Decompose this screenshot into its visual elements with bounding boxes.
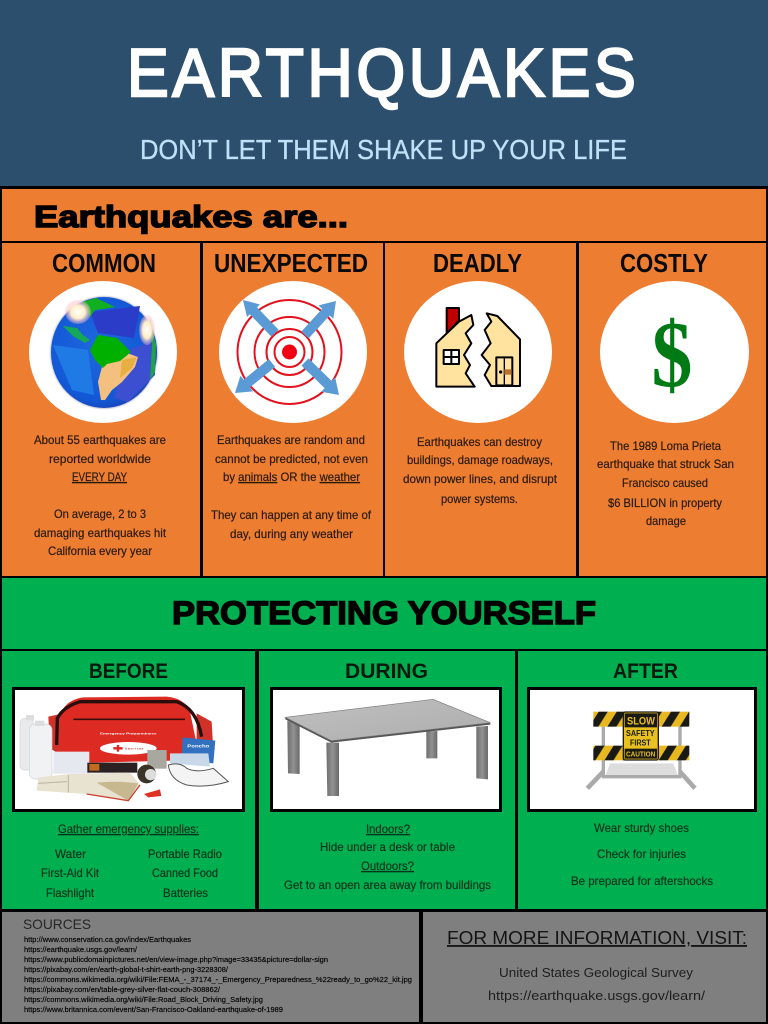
heading: protecting yourself: PROTECTING YOURSELF bbox=[172, 595, 596, 631]
panel: more information bbox=[423, 912, 766, 1022]
text: costly body bbox=[597, 439, 734, 528]
panel: sources bbox=[2, 912, 419, 1022]
text: before supplies: Gather emergency supplies: bbox=[58, 822, 199, 836]
heading: unexpected: UNEXPECTED bbox=[214, 250, 368, 278]
panel: protecting yourself heading bbox=[2, 578, 766, 649]
text: costly body: Francisco caused bbox=[622, 476, 708, 490]
panel: unexpected bbox=[203, 243, 383, 576]
image: road barricade: SAFETY bbox=[626, 729, 655, 738]
text: during advice: Hide under a desk or table bbox=[320, 840, 455, 854]
text: source links: https://pixabay.com/en/earth-global-t-shirt-earth-png-3228308/ bbox=[24, 965, 229, 974]
icon: epicenter target bbox=[219, 281, 367, 423]
text: source links: https://earthquake.usgs.gov/learn/ bbox=[24, 945, 138, 954]
text: common body: EVERY DAY bbox=[72, 470, 127, 484]
text: common body: On average, 2 to 3 bbox=[54, 507, 146, 521]
heading: common: COMMON bbox=[52, 250, 156, 278]
image: road barricade: CAUTION bbox=[626, 751, 655, 758]
image: road barricade: FIRST bbox=[630, 739, 651, 748]
text: before supplies: Water bbox=[55, 847, 86, 861]
text: usgs name: United States Geological Survey bbox=[499, 966, 694, 980]
title: EARTHQUAKES bbox=[127, 35, 636, 111]
text: common body: reported worldwide bbox=[49, 452, 151, 466]
text: before supplies: Portable Radio bbox=[148, 847, 222, 861]
text: common body bbox=[34, 433, 167, 558]
icon: dollar sign: $ bbox=[652, 303, 692, 407]
text: source links: https://www.publicdomainpictures.net/en/view-image.php?image=33435&picture=dollar-sign bbox=[24, 955, 328, 964]
text: before supplies bbox=[41, 822, 222, 900]
heading: during: DURING bbox=[345, 660, 428, 683]
text: costly body: earthquake that struck San bbox=[597, 457, 734, 471]
text: source links: https://www.britannica.com/event/San-Francisco-Oakland-earthquake-of-1989 bbox=[24, 1005, 283, 1014]
text: costly body: The 1989 Loma Prieta bbox=[610, 439, 721, 453]
text: common body: damaging earthquakes hit bbox=[34, 526, 167, 540]
text: before supplies: First-Aid Kit bbox=[41, 866, 100, 880]
heading: for more information: FOR MORE INFORMATION, VISIT: bbox=[447, 927, 747, 948]
text: during advice bbox=[284, 822, 491, 892]
panel: during bbox=[259, 651, 515, 909]
text: during advice: Outdoors? bbox=[361, 859, 414, 873]
text: unexpected body: by animals OR the weather bbox=[223, 470, 360, 484]
text: source links: https://commons.wikimedia.org/wiki/File:FEMA_-_37174_-_Emergency_Preparedness_%22ready_to_go%22_kit.jpg bbox=[24, 975, 412, 984]
text: deadly body: Earthquakes can destroy bbox=[417, 435, 542, 449]
text: before supplies: Canned Food bbox=[152, 866, 218, 880]
text: source links: https://pixabay.com/en/table-grey-silver-flat-couch-308862/ bbox=[24, 985, 221, 994]
text: unexpected body bbox=[211, 433, 372, 541]
image: emergency kit: Poncho bbox=[187, 743, 210, 748]
heading: before: BEFORE bbox=[89, 660, 168, 683]
text: deadly body bbox=[403, 435, 558, 506]
heading: deadly: DEADLY bbox=[433, 250, 522, 278]
panel: before bbox=[2, 651, 255, 909]
heading: earthquakes are: Earthquakes are... bbox=[34, 199, 348, 234]
text: during advice: Indoors? bbox=[366, 822, 410, 836]
text: after advice bbox=[571, 821, 713, 888]
icon: broken house bbox=[404, 281, 552, 423]
image: emergency kit bbox=[14, 688, 244, 810]
text: unexpected body: day, during any weather bbox=[230, 527, 353, 541]
heading: after: AFTER bbox=[613, 660, 678, 683]
image: emergency kit: Emergency Preparedness bbox=[100, 732, 157, 736]
text: unexpected body: They can happen at any time of bbox=[211, 508, 372, 522]
text: unexpected body: cannot be predicted, not even bbox=[215, 452, 368, 466]
image: road barricade: SLOW bbox=[627, 716, 656, 728]
panel: deadly bbox=[385, 243, 576, 576]
text: common body: California every year bbox=[48, 544, 152, 558]
text: after advice: Check for injuries bbox=[597, 847, 686, 861]
text: costly body: damage bbox=[646, 514, 686, 528]
text: deadly body: power systems. bbox=[441, 492, 518, 506]
text: source links: http://www.conservation.ca.gov/index/Earthquakes bbox=[24, 935, 191, 944]
text: after advice: Wear sturdy shoes bbox=[594, 821, 689, 835]
text: source links: https://commons.wikimedia.org/wiki/File:Road_Block_Driving_Safety.jpg bbox=[24, 995, 263, 1004]
panel: after bbox=[518, 651, 766, 909]
text: unexpected body: Earthquakes are random and bbox=[217, 433, 365, 447]
text: deadly body: down power lines, and disrupt bbox=[403, 472, 558, 486]
text: during advice: Get to an open area away from buildings bbox=[284, 878, 491, 892]
text: after advice: Be prepared for aftershocks bbox=[571, 874, 713, 888]
icon: dollar sign bbox=[600, 281, 749, 423]
image: road barricade bbox=[528, 688, 756, 810]
subtitle: DON’T LET THEM SHAKE UP YOUR LIFE bbox=[140, 134, 627, 165]
text: deadly body: buildings, damage roadways, bbox=[407, 453, 553, 467]
header panel bbox=[0, 0, 768, 186]
image: emergency kit: American bbox=[125, 746, 143, 750]
icon: globe bbox=[29, 281, 177, 423]
panel: earthquakes are heading bbox=[2, 189, 766, 241]
text: source links bbox=[24, 935, 412, 1014]
text: costly body: $6 BILLION in property bbox=[608, 496, 722, 510]
heading: sources: SOURCES bbox=[23, 916, 91, 932]
text: before supplies: Batteries bbox=[163, 886, 208, 900]
text: common body: About 55 earthquakes are bbox=[34, 433, 166, 447]
panel: common bbox=[2, 243, 200, 576]
image: table bbox=[272, 688, 500, 810]
panel: costly bbox=[579, 243, 766, 576]
text: usgs link: https://earthquake.usgs.gov/learn/ bbox=[488, 989, 706, 1003]
heading: costly: COSTLY bbox=[620, 250, 708, 278]
text: before supplies: Flashlight bbox=[46, 886, 95, 900]
